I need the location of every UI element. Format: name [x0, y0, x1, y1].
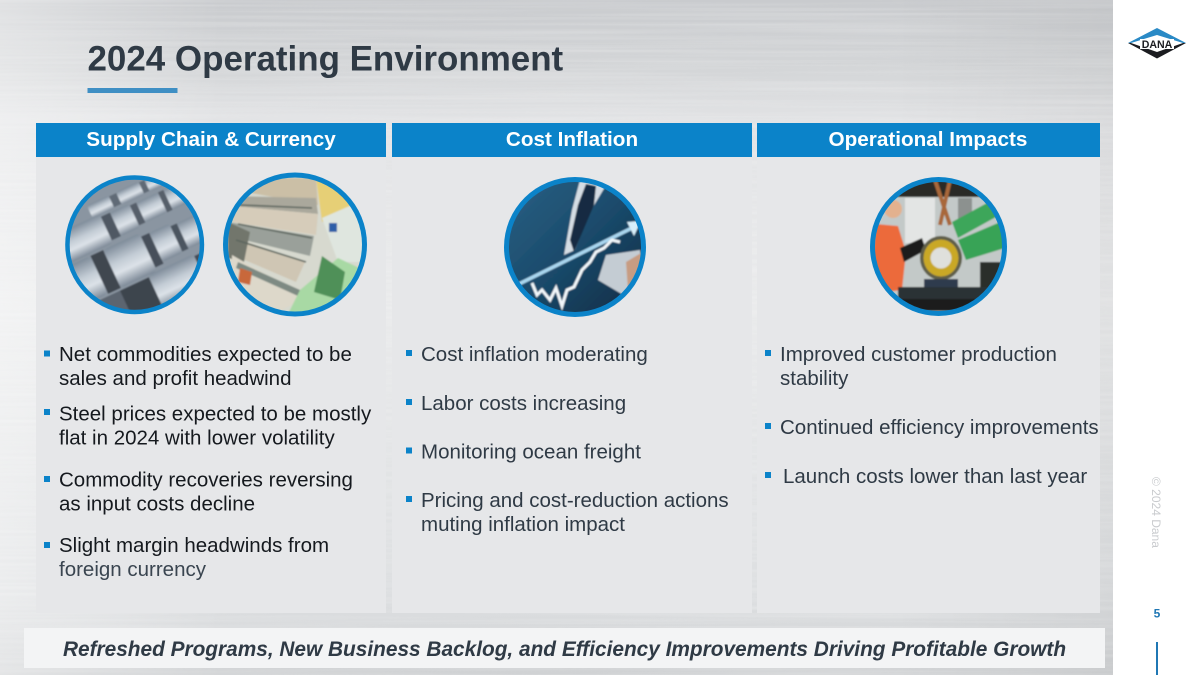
heading: supply chain and currency [36, 123, 386, 157]
icon: Dana logo: DANA [1142, 39, 1173, 51]
bullet list: operational impacts: Launch costs lower than last year [783, 465, 1087, 488]
bullet list: cost inflation: muting inflation impact [421, 513, 625, 536]
bullet list: supply chain: foreign currency [59, 558, 207, 581]
bullet list: operational impacts: Improved customer production [780, 343, 1057, 366]
icon: rising chart photo [504, 177, 646, 317]
bullet list: supply chain: Net commodities expected to be [59, 343, 352, 366]
bullet list: supply chain [44, 343, 372, 581]
heading: operational impacts: Operational Impacts [829, 128, 1027, 151]
panel body [36, 157, 386, 613]
panel: operational impacts [757, 123, 1100, 613]
bullet list: supply chain: flat in 2024 with lower volatility [59, 426, 335, 450]
icon: banknotes photo [222, 172, 368, 320]
bullet list: supply chain: Commodity recoveries reversing [59, 468, 353, 492]
panel: cost inflation [392, 123, 752, 613]
callout: bottom takeaway: Refreshed Programs, New Business Backlog, and Efficiency Improvements Driving Profitable Growth [63, 638, 1066, 661]
heading: supply chain and currency: Supply Chain & Currency [86, 128, 336, 151]
panel: supply chain and currency [30, 123, 386, 613]
icon: technician and gear photo [870, 177, 1008, 317]
bullet list: supply chain: Steel prices expected to be mostly [59, 402, 372, 426]
bullet list: cost inflation: Cost inflation moderating [421, 343, 648, 366]
bullet list: supply chain: Slight margin headwinds from [59, 534, 329, 557]
panel body [392, 157, 752, 613]
page marker line [1156, 642, 1158, 675]
bullet list: cost inflation: Labor costs increasing [421, 392, 626, 415]
bullet list: cost inflation: Monitoring ocean freight [421, 440, 641, 464]
copyright note: © 2024 Dana [1149, 477, 1163, 548]
bullet list: cost inflation [406, 343, 729, 536]
callout: bottom takeaway [24, 628, 1105, 668]
panel body [757, 157, 1100, 613]
icon: Dana logo [1128, 28, 1186, 58]
title underline [88, 88, 178, 93]
bullet list: operational impacts [765, 343, 1099, 488]
heading: cost inflation [392, 123, 752, 157]
bullet list: cost inflation: Pricing and cost-reduction actions [421, 489, 729, 512]
icon: steel coils photo [65, 175, 204, 314]
heading: cost inflation: Cost Inflation [506, 128, 638, 151]
sidebar white strip [1113, 0, 1200, 675]
bullet list: operational impacts: Continued efficiency improvements [780, 416, 1099, 439]
title: 2024 Operating Environment [88, 40, 564, 78]
heading: operational impacts [757, 123, 1100, 157]
bullet list: supply chain: sales and profit headwind [59, 367, 292, 390]
bullet list: supply chain: as input costs decline [59, 492, 255, 516]
page number: 5 [1154, 606, 1161, 620]
bullet list: operational impacts: stability [780, 367, 849, 390]
